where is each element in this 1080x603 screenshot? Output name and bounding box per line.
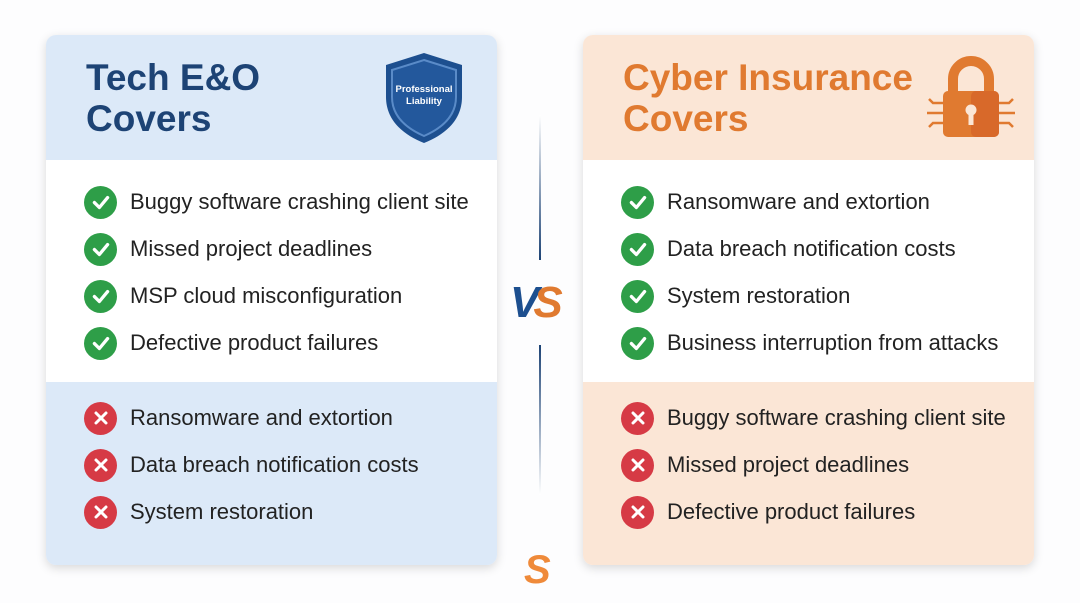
icon: shield <box>386 53 462 143</box>
not covered list: Missed project deadlines <box>667 452 909 477</box>
icon: lock <box>927 56 1015 137</box>
divider line top <box>539 115 541 260</box>
covered list: Defective product failures <box>130 330 378 355</box>
covered list: Missed project deadlines <box>130 236 372 261</box>
icon: shield: Professional <box>395 84 453 95</box>
title: Covers <box>86 98 211 139</box>
covered list: Buggy software crashing client site <box>130 189 469 214</box>
covered list: Data breach notification costs <box>667 236 956 261</box>
covered list: Business interruption from attacks <box>667 330 998 355</box>
header: Cyber <box>583 35 1034 160</box>
covered list: System restoration <box>667 283 850 308</box>
not covered list: Buggy software crashing client site <box>667 405 1006 430</box>
header: Tech E&O <box>46 35 497 160</box>
icon: shield: Liability <box>406 96 443 107</box>
panel: Cyber Insurance <box>583 35 1034 565</box>
title <box>86 57 260 139</box>
covered list <box>583 160 1034 382</box>
title <box>623 57 913 139</box>
not covered list: Data breach notification costs <box>130 452 419 477</box>
not covered list <box>46 382 497 565</box>
not covered list <box>583 382 1034 565</box>
panel: Tech E&O <box>46 35 497 565</box>
not covered list: Defective product failures <box>667 499 915 524</box>
title: Covers <box>623 98 748 139</box>
covered list: MSP cloud misconfiguration <box>130 283 402 308</box>
VS badge: VS <box>510 278 557 327</box>
not covered list: Ransomware and extortion <box>130 405 393 430</box>
covered list: Ransomware and extortion <box>667 189 930 214</box>
divider line bottom <box>539 345 541 495</box>
title: Tech E&O <box>86 57 260 98</box>
not covered list: System restoration <box>130 499 313 524</box>
covered list <box>46 160 497 382</box>
bottom S mark: S <box>524 548 551 592</box>
title: Cyber Insurance <box>623 57 913 98</box>
